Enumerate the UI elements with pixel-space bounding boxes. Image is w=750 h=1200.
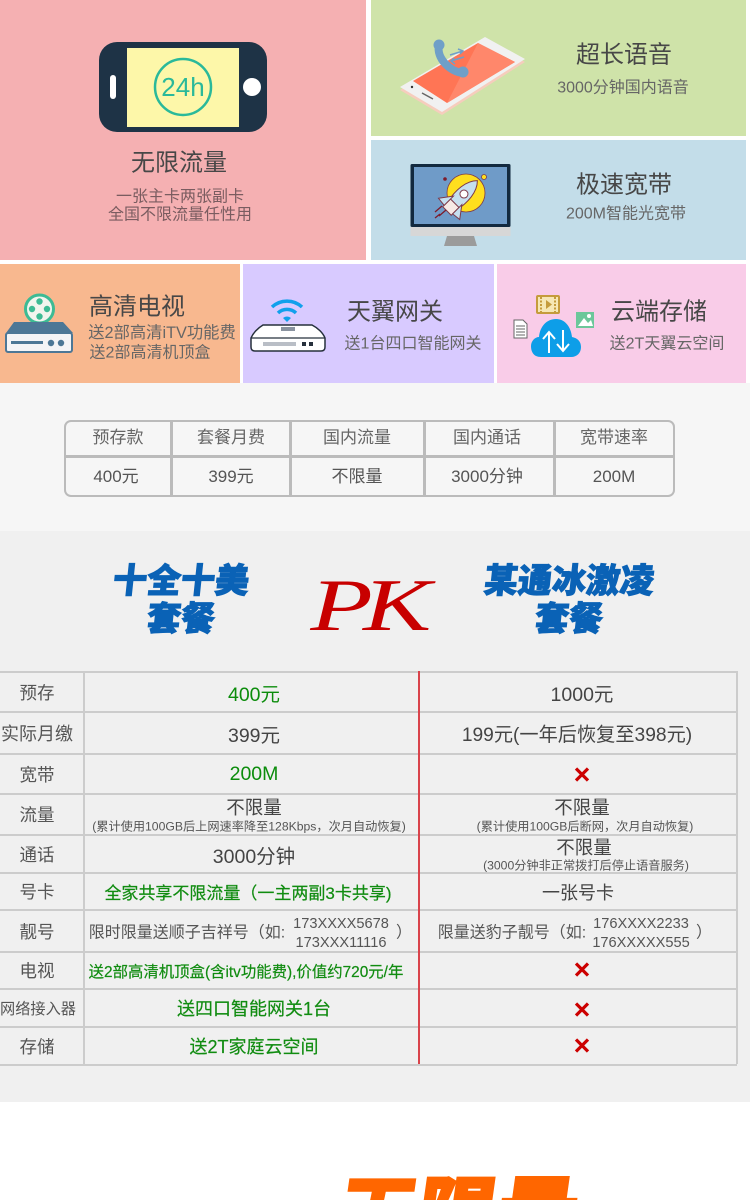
table header: prepayment: 预存款 [92,428,144,447]
competitor: cross icon [574,1002,590,1017]
table header: broadband speed: 宽带速率 [580,428,648,447]
table header: domestic calls: 国内通话 [453,428,521,447]
competitor value: 不限量 [554,797,610,818]
description: 送2T天翼云空间 [610,335,724,352]
row: broadband [0,755,737,795]
panel: HD TV [0,264,240,383]
value: domestic calls: 3000分钟 [451,467,523,486]
logo: competitor package [482,562,656,639]
row: TV [0,953,737,990]
description: 3000分钟国内语音 [557,79,689,96]
row label: 实际月缴 [1,724,73,744]
icon: phone 24h: 24h [161,72,205,102]
description: 送1台四口智能网关 [345,335,481,352]
row label: 流量 [20,805,54,825]
logo: our package [111,562,251,639]
heading: 极速宽带 [576,172,672,199]
icon: wifi router [250,299,326,352]
our sample numbers: 173XXXX5678 [293,916,389,932]
value: monthly fee: 399元 [208,467,254,486]
competitor value: 不限量 [556,837,612,858]
row: storage [0,1028,737,1066]
panel: fast broadband [371,140,746,260]
row label: 电视 [20,961,54,981]
heading: 云端存储 [611,299,707,326]
description: 200M智能光宽带 [566,205,686,222]
competitor value: 199元(一年后恢复至398元) [462,725,692,746]
row: SIM cards [0,874,737,911]
row label: 靓号 [20,922,54,942]
our value: 送2T家庭云空间 [189,1037,318,1057]
row: calls [0,836,737,874]
our value: 送2部高清机顶盒(含itv功能费),价值约720元/年 [89,964,403,980]
competitor: cross icon [574,767,590,782]
icon: set-top box with film reel [5,294,73,353]
our value: 399元 [228,724,280,746]
row label: 网络接入器 [0,1001,76,1018]
row label: 预存 [20,682,54,702]
our offer: 限时限量送顺子吉祥号（如: [89,924,285,941]
competitor: cross icon [574,1038,590,1053]
competitor offer: 限量送豹子靓号（如: [438,924,586,941]
competitor note: (累计使用100GB后断网，次月自动恢复) [477,820,693,834]
table: comparison [0,671,738,1064]
our sample numbers [293,916,389,951]
table: package summary [64,420,675,497]
logo line 1: 十全十美 [111,563,251,601]
our value: 400元 [228,684,280,706]
table header: monthly fee: 套餐月费 [197,428,265,447]
row: actual monthly fee [0,713,737,755]
heading: 高清电视 [89,294,185,321]
icon: phone 24h [99,42,267,132]
competitor sample numbers [592,916,690,951]
row: prepayment [0,673,737,713]
logo line 2: 套餐 [533,601,605,639]
our value: 不限量 [226,797,282,818]
description line 2: 全国不限流量任性用 [108,206,252,223]
heading: 无限流量 [131,150,227,177]
our value: 送四口智能网关1台 [177,999,331,1019]
description line 2: 送2部高清机顶盒 [90,344,210,361]
heading: 天翼网关 [347,299,443,326]
closing bracket: ） [396,924,412,941]
closing bracket: ） [696,924,712,941]
competitor value: 一张号卡 [542,882,614,902]
competitor value: 1000元 [551,684,613,706]
description: 一张主卡两张副卡 [116,188,244,205]
row label: 通话 [20,844,54,864]
row label: 宽带 [20,764,54,784]
our value: 全家共享不限流量（一主两副3卡共享) [104,884,392,903]
our value: 200M [230,762,278,784]
row: lucky numbers [0,911,737,953]
section: package summary [0,383,750,531]
value: prepayment: 400元 [93,467,139,486]
competitor: cross icon [574,962,590,977]
competitor note: (3000分钟非正常拨打后停止语音服务) [483,859,689,873]
row: data [0,795,737,836]
logo line 2: 套餐 [145,601,217,639]
panel: Tianyi gateway [243,264,494,383]
icon: tilted phone with handset [400,37,525,115]
our sample numbers: 173XXX11116 [296,935,386,951]
PK mark: PK [310,565,422,647]
row label: 号卡 [20,882,54,902]
row label: 存储 [20,1036,54,1056]
description: 送2部高清iTV功能费 [88,324,236,342]
logo line 1: 某通冰激凌 [482,563,656,601]
row: network access device [0,990,737,1028]
our value: 3000分钟 [213,846,295,868]
value: domestic data: 不限量 [332,467,382,486]
heading: 超长语音 [576,42,672,69]
panel: cloud storage [497,264,746,383]
value: broadband speed: 200M [593,467,635,486]
table header: domestic data: 国内流量 [323,428,391,447]
competitor sample numbers: 176XXXX2233 [593,916,689,932]
our note: (累计使用100GB后上网速率降至128Kbps，次月自动恢复) [92,820,406,834]
competitor sample numbers: 176XXXXX555 [592,935,690,951]
panel: unlimited data [0,0,366,260]
icon: monitor with rocket [410,164,510,246]
section: comparison [0,531,750,1102]
icon: cloud with files [514,295,594,357]
panel: long voice [371,0,746,136]
